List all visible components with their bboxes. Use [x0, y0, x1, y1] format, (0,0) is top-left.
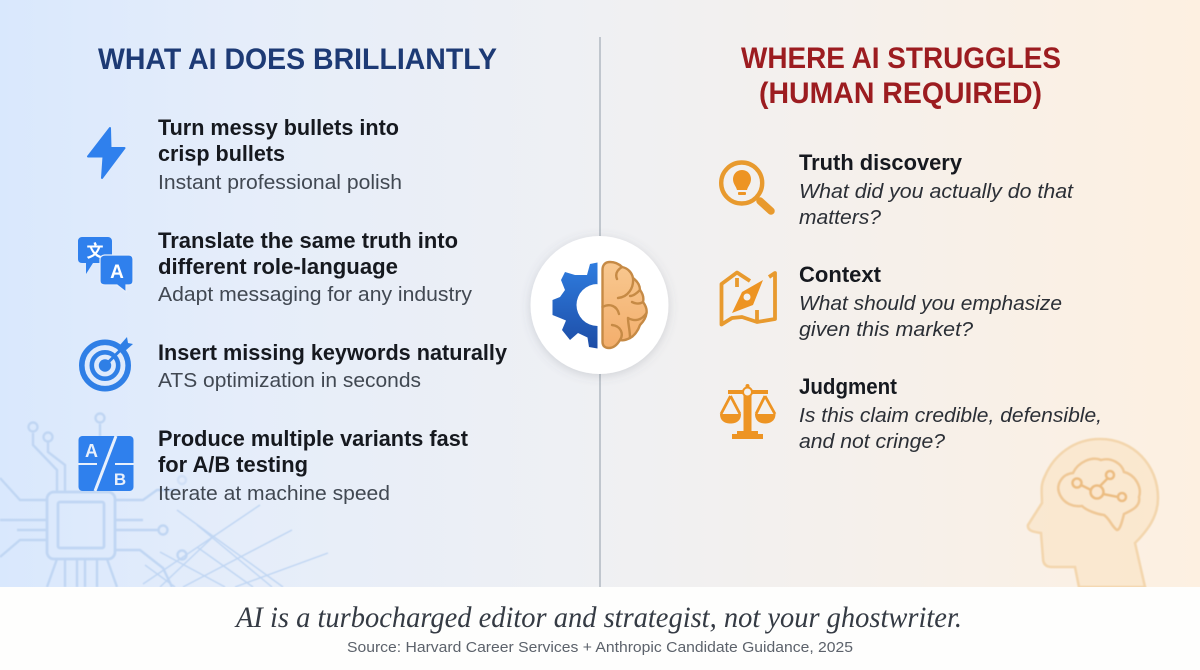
panel: where AI struggles — [720, 150, 1102, 453]
icon: translate bubbles: A — [110, 262, 124, 283]
text: variants: for A/B testing — [158, 452, 308, 477]
takeaway quote: AI is a turbocharged editor and strategist, not your ghostwriter. — [234, 601, 962, 634]
icon: map and compass — [722, 272, 775, 324]
text: context — [799, 262, 1062, 341]
text: judgment: and not cringe? — [799, 430, 946, 453]
text: context: given this market? — [799, 318, 974, 341]
icon: translate bubbles: 文 — [86, 241, 104, 261]
heading: where AI struggles: WHERE AI STRUGGLES — [741, 42, 1061, 75]
item: translate — [78, 228, 473, 306]
text: judgment: Judgment — [799, 374, 898, 399]
text: truth discovery: What did you actually do that — [799, 180, 1074, 203]
decorative head with brain network — [1028, 439, 1158, 587]
item: polish — [88, 115, 402, 194]
text: context: What should you emphasize — [799, 292, 1062, 315]
heading: what AI does brilliantly: WHAT AI DOES BRILLIANTLY — [98, 43, 497, 76]
icon: magnifier with bulb — [721, 162, 771, 211]
item: truth discovery — [721, 150, 1074, 229]
text: variants: Iterate at machine speed — [158, 482, 390, 505]
item: context — [722, 262, 1062, 341]
item: keywords — [82, 337, 508, 392]
text: polish: Instant professional polish — [158, 171, 402, 194]
icon: lightning bolt — [88, 128, 124, 178]
text: keywords: ATS optimization in seconds — [158, 369, 421, 392]
text: variants — [158, 426, 469, 505]
icon: half gear — [552, 262, 598, 348]
icon: translate bubbles — [78, 237, 133, 292]
text: truth discovery — [799, 150, 1074, 229]
text: translate — [158, 228, 473, 306]
center divider — [599, 37, 601, 587]
text: polish: crisp bullets — [158, 141, 285, 166]
text: translate: different role-language — [158, 254, 398, 279]
text: context: Context — [799, 262, 882, 287]
text: truth discovery: Truth discovery — [799, 150, 963, 175]
footer band — [0, 587, 1200, 670]
text: polish — [158, 115, 402, 194]
source line: Source: Harvard Career Services + Anthropic Candidate Guidance, 2025 — [347, 639, 853, 656]
text: judgment — [799, 374, 1102, 453]
item: variants — [78, 426, 469, 505]
icon: A/B split: A — [85, 441, 98, 461]
icon: balance scales — [720, 384, 776, 439]
text: translate: Adapt messaging for any industry — [158, 283, 473, 306]
text: variants: Produce multiple variants fast — [158, 426, 469, 451]
center badge: gear and brain — [530, 236, 668, 374]
decorative circuit chip illustration — [0, 414, 328, 587]
text: judgment: Is this claim credible, defensible, — [799, 404, 1102, 427]
icon: A/B split — [78, 436, 134, 491]
heading: where AI struggles — [741, 42, 1061, 110]
icon: target with arrow — [82, 337, 133, 389]
text: translate: Translate the same truth into — [158, 228, 458, 253]
text: polish: Turn messy bullets into — [158, 115, 399, 140]
text: keywords: Insert missing keywords naturally — [158, 340, 508, 365]
icon: half brain — [602, 262, 647, 348]
text: keywords — [158, 340, 508, 392]
panel: what AI does brilliantly — [78, 115, 508, 505]
text: truth discovery: matters? — [799, 206, 882, 229]
item: judgment — [720, 374, 1102, 453]
icon: A/B split: B — [114, 470, 126, 489]
heading: where AI struggles: (HUMAN REQUIRED) — [759, 77, 1042, 110]
